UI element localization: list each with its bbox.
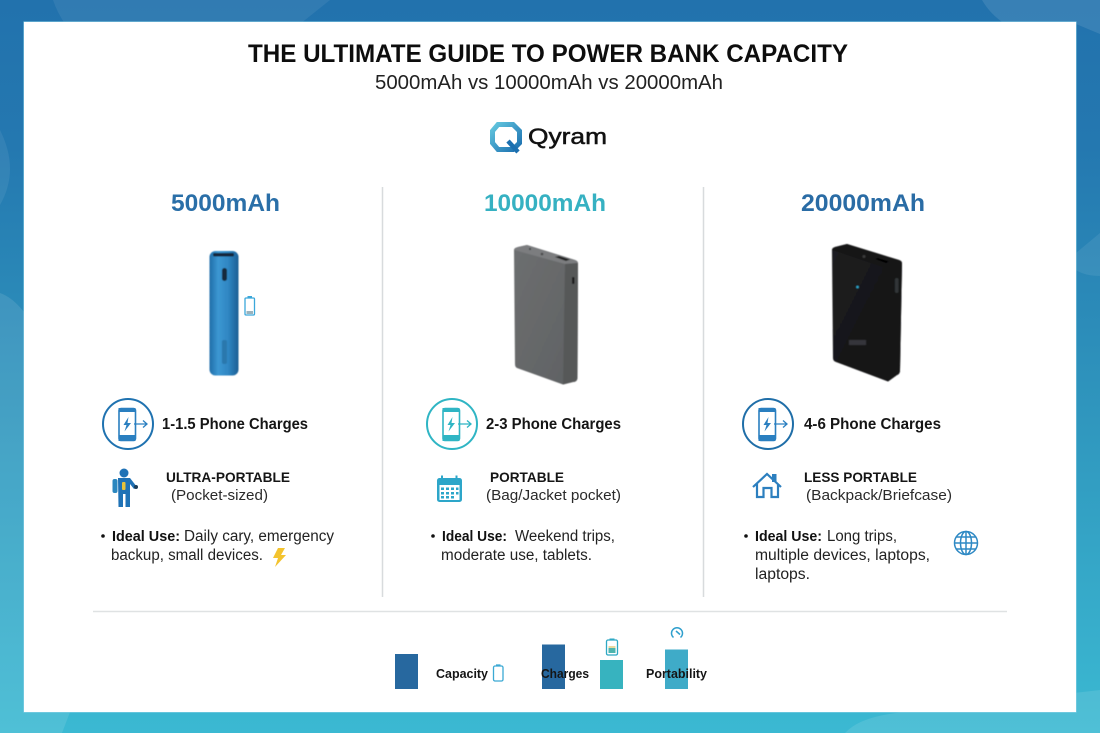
label: capacity: Capacity — [436, 667, 488, 681]
power bank: blue cylinder — [210, 251, 238, 376]
text: ideal use: Ideal Use: — [755, 529, 822, 545]
bar: capacity — [395, 654, 418, 689]
text: ideal use: moderate use, tablets. — [441, 547, 592, 564]
label: charges: Charges — [541, 667, 589, 681]
bar: portability — [665, 650, 688, 689]
heading: 20000mAh: 20000mAh — [801, 190, 925, 217]
chart: comparison legend bars — [395, 628, 707, 689]
icon: globe — [954, 532, 978, 554]
label: portability: LESS PORTABLE — [804, 469, 917, 485]
label: size: (Bag/Jacket pocket) — [486, 487, 621, 504]
stat: phone charges: 4-6 Phone Charges — [804, 416, 941, 433]
text: ideal use: Ideal Use: — [112, 529, 180, 545]
text: ideal use: Long trips, — [827, 528, 897, 545]
power bank: black — [832, 244, 902, 382]
logo: Qyram — [492, 124, 607, 152]
icon: house — [753, 474, 781, 497]
label: portability: ULTRA-PORTABLE — [166, 469, 290, 485]
text: ideal use — [431, 528, 615, 564]
icon: phone charging — [103, 399, 153, 449]
label: portability: Portability — [646, 667, 707, 681]
power bank: grey — [514, 245, 578, 384]
icon: phone charging — [427, 399, 477, 449]
panel: 10000mAh — [427, 190, 621, 564]
text: ideal use: backup, small devices. — [111, 547, 263, 564]
icon: small battery — [245, 296, 254, 315]
text: ideal use — [101, 528, 334, 564]
icon: empty battery — [494, 665, 503, 681]
panel: 5000mAh — [101, 190, 334, 567]
text: ideal use — [744, 528, 930, 583]
text: ideal use: Daily cary, emergency — [184, 528, 334, 545]
icon: lightning bolt — [273, 548, 286, 567]
heading: 5000mAh: 5000mAh — [171, 190, 280, 217]
icon: traveller — [112, 468, 138, 507]
text: ideal use: Weekend trips, — [515, 528, 615, 545]
title: THE ULTIMATE GUIDE TO POWER BANK CAPACITY — [248, 40, 848, 68]
logo: Qyram: Qyram — [528, 124, 607, 149]
icon: gauge — [672, 628, 682, 638]
icon: phone charging — [743, 399, 793, 449]
bar: charges teal — [600, 660, 623, 689]
icon: calendar — [437, 476, 462, 502]
label: size: (Backpack/Briefcase) — [806, 487, 952, 504]
text: ideal use: Ideal Use: — [442, 529, 507, 545]
subtitle: 5000mAh vs 10000mAh vs 20000mAh — [375, 72, 723, 94]
icon: battery half full — [606, 638, 618, 655]
panel: 20000mAh — [743, 190, 978, 583]
stat: phone charges: 1-1.5 Phone Charges — [162, 416, 308, 433]
stat: phone charges: 2-3 Phone Charges — [486, 416, 621, 433]
heading: 10000mAh: 10000mAh — [484, 190, 606, 217]
bar: charges — [542, 644, 565, 689]
label: portability: PORTABLE — [490, 469, 564, 485]
text: ideal use: laptops. — [755, 566, 810, 583]
text: ideal use: multiple devices, laptops, — [755, 547, 930, 564]
label: size: (Pocket-sized) — [171, 487, 268, 504]
